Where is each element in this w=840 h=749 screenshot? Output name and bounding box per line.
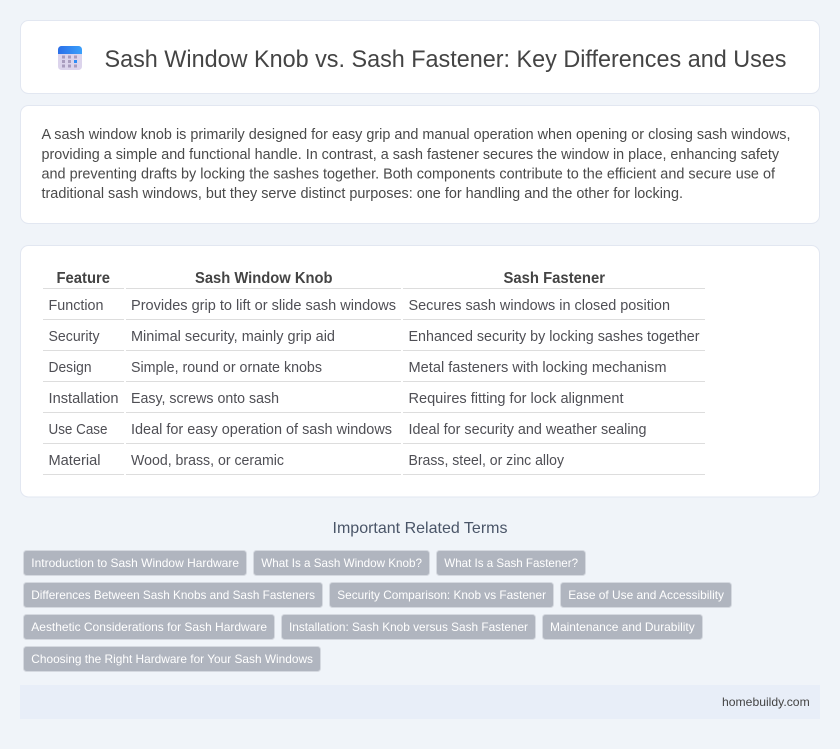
table row: design: Design bbox=[48, 360, 92, 376]
tag: Choosing the Right Hardware for Your Sash Windows bbox=[31, 652, 313, 666]
table header row bbox=[56, 270, 605, 287]
table row: design bbox=[48, 360, 667, 376]
tag bbox=[330, 582, 554, 608]
table row: function: Provides grip to lift or slide sash windows bbox=[131, 298, 396, 314]
tag bbox=[24, 646, 320, 672]
tag: Maintenance and Durability bbox=[550, 620, 695, 634]
text block: paragraph: A sash window knob is primarily designed for easy grip and manual operation when opening or closing sash windows, bbox=[42, 127, 790, 143]
table row: use case bbox=[48, 422, 646, 438]
related term tags bbox=[24, 550, 732, 672]
table row: security: Security bbox=[48, 329, 100, 345]
icon: calendar grid bbox=[58, 46, 82, 70]
tag bbox=[542, 614, 702, 640]
table row: installation: Installation bbox=[48, 391, 118, 407]
table row: use case: Ideal for easy operation of sash windows bbox=[131, 422, 392, 438]
tag bbox=[254, 550, 430, 576]
tag bbox=[282, 614, 536, 640]
tag: Ease of Use and Accessibility bbox=[568, 588, 724, 602]
tag: Aesthetic Considerations for Sash Hardware bbox=[31, 620, 267, 634]
table row: material: Brass, steel, or zinc alloy bbox=[408, 453, 565, 469]
footer text: site name: homebuildy.com bbox=[722, 695, 810, 709]
text block: paragraph: and preventing drafts by locking the sashes together. Both components contribute to the efficient and secure use of bbox=[42, 166, 776, 182]
tag: Security Comparison: Knob vs Fastener bbox=[337, 588, 546, 602]
text block: paragraph: traditional sash windows, but they serve distinct purposes: one for handling and the other for locking. bbox=[42, 186, 683, 202]
table header row: Sash Fastener bbox=[504, 270, 605, 287]
tag: What Is a Sash Window Knob? bbox=[261, 556, 422, 570]
panel: introduction paragraph bbox=[20, 106, 820, 224]
tag: Installation: Sash Knob versus Sash Fastener bbox=[289, 620, 528, 634]
table row: security bbox=[48, 329, 700, 345]
table row: use case: Use Case bbox=[48, 422, 108, 438]
tag: Introduction to Sash Window Hardware bbox=[31, 556, 239, 570]
table row: installation: Easy, screws onto sash bbox=[131, 391, 279, 407]
panel: comparison table bbox=[20, 246, 820, 497]
table row: function bbox=[48, 298, 670, 314]
table row: design: Metal fasteners with locking mechanism bbox=[408, 360, 667, 376]
heading: important related terms: Important Related Terms bbox=[332, 520, 508, 537]
tag bbox=[560, 582, 732, 608]
title: Sash Window Knob vs. Sash Fastener: Key Differences and Uses bbox=[104, 46, 786, 73]
tag bbox=[24, 614, 274, 640]
table row: function: Secures sash windows in closed position bbox=[408, 298, 670, 314]
header panel bbox=[20, 20, 820, 94]
text block: paragraph bbox=[42, 127, 790, 202]
footer bar bbox=[20, 685, 820, 719]
text block: paragraph: providing a simple and functional handle. In contrast, a sash fastener secures the window in place, enhancing safety bbox=[42, 147, 780, 163]
tag: Differences Between Sash Knobs and Sash Fasteners bbox=[31, 588, 315, 602]
table row: use case: Ideal for security and weather sealing bbox=[408, 422, 646, 438]
table row: installation bbox=[48, 391, 624, 407]
table row: design: Simple, round or ornate knobs bbox=[131, 360, 322, 376]
table row: material bbox=[48, 453, 565, 469]
tag bbox=[436, 550, 586, 576]
table row: material: Material bbox=[48, 453, 100, 469]
table row: installation: Requires fitting for lock alignment bbox=[408, 391, 624, 407]
table row: security: Minimal security, mainly grip aid bbox=[131, 329, 335, 345]
table row: function: Function bbox=[48, 298, 104, 314]
tag bbox=[24, 582, 322, 608]
table header row: Feature bbox=[56, 270, 110, 287]
table row: security: Enhanced security by locking sashes together bbox=[408, 329, 700, 345]
tag: What Is a Sash Fastener? bbox=[444, 556, 578, 570]
table header row: Sash Window Knob bbox=[195, 270, 332, 287]
table row: material: Wood, brass, or ceramic bbox=[131, 453, 284, 469]
tag bbox=[24, 550, 246, 576]
